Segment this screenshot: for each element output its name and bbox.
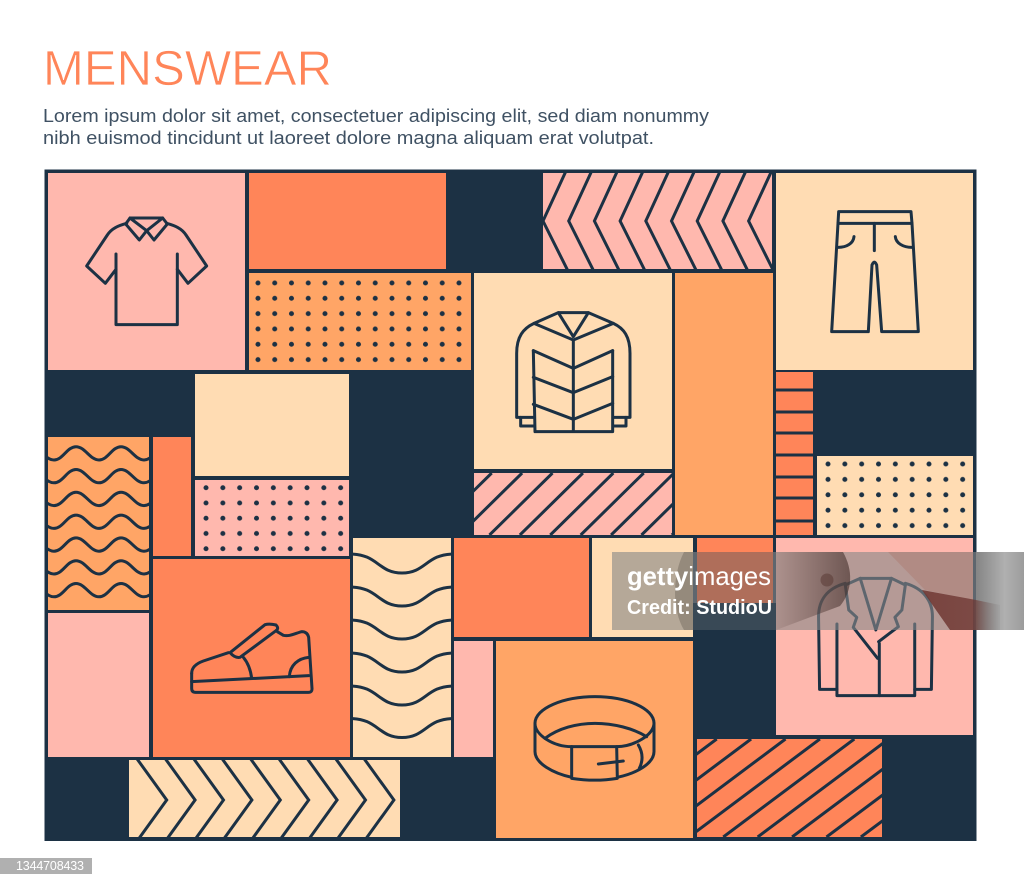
watermark text: credit: Credit: StudioU	[627, 597, 772, 619]
image id badge	[0, 858, 92, 874]
tile: pink dots	[195, 480, 349, 556]
tile: pink narrow block	[454, 641, 493, 757]
description text: Lorem ipsum dolor sit amet, consectetuer adipiscing elit, sed diam nonummy	[43, 105, 710, 126]
tile: cream block small	[592, 538, 693, 637]
icon: trousers	[832, 212, 918, 332]
panel background	[44, 170, 976, 841]
tile: cream chevrons	[129, 758, 400, 842]
panel: belt tile	[496, 641, 693, 838]
tile: orange dots	[249, 273, 471, 370]
tile: cream dots	[817, 456, 973, 535]
tile: pink diagonal stripes	[474, 473, 672, 535]
tile: orange narrow block	[153, 437, 191, 556]
tile: cream waves	[350, 538, 454, 757]
tile: orange block centre	[454, 538, 589, 637]
panel: blazer tile	[776, 538, 973, 735]
icon: belt	[535, 697, 654, 780]
panel: trousers tile	[776, 173, 973, 370]
tile: orange block	[249, 173, 446, 269]
tile: orange block small	[697, 538, 773, 603]
panel: puffer jacket tile	[474, 273, 672, 469]
panel: sneaker tile	[153, 559, 350, 757]
image id badge: 1344708433	[16, 859, 84, 873]
mosaic panel	[31, 170, 1024, 842]
panel: polo shirt tile	[48, 173, 245, 370]
tile: light orange block	[675, 273, 773, 535]
description text: nibh euismod tincidunt ut laoreet dolore magna aliquam erat volutpat.	[43, 127, 654, 148]
watermark banner	[612, 552, 1024, 630]
title: MENSWEAR	[43, 42, 332, 96]
tile: pink chevrons	[543, 171, 774, 271]
tile: orange diagonal stripes	[697, 739, 882, 837]
icon: blazer	[819, 578, 932, 696]
tile: cream block	[195, 374, 349, 476]
tile: pink block left	[48, 613, 149, 757]
description text	[43, 105, 710, 148]
icon: puffer jacket	[517, 313, 630, 432]
tile: orange horizontal stripes	[776, 372, 813, 535]
watermark text: getty images: gettyimages	[627, 561, 771, 591]
icon: sneaker	[192, 624, 312, 692]
icon: polo shirt	[87, 218, 207, 325]
tile: orange waves	[48, 437, 149, 610]
